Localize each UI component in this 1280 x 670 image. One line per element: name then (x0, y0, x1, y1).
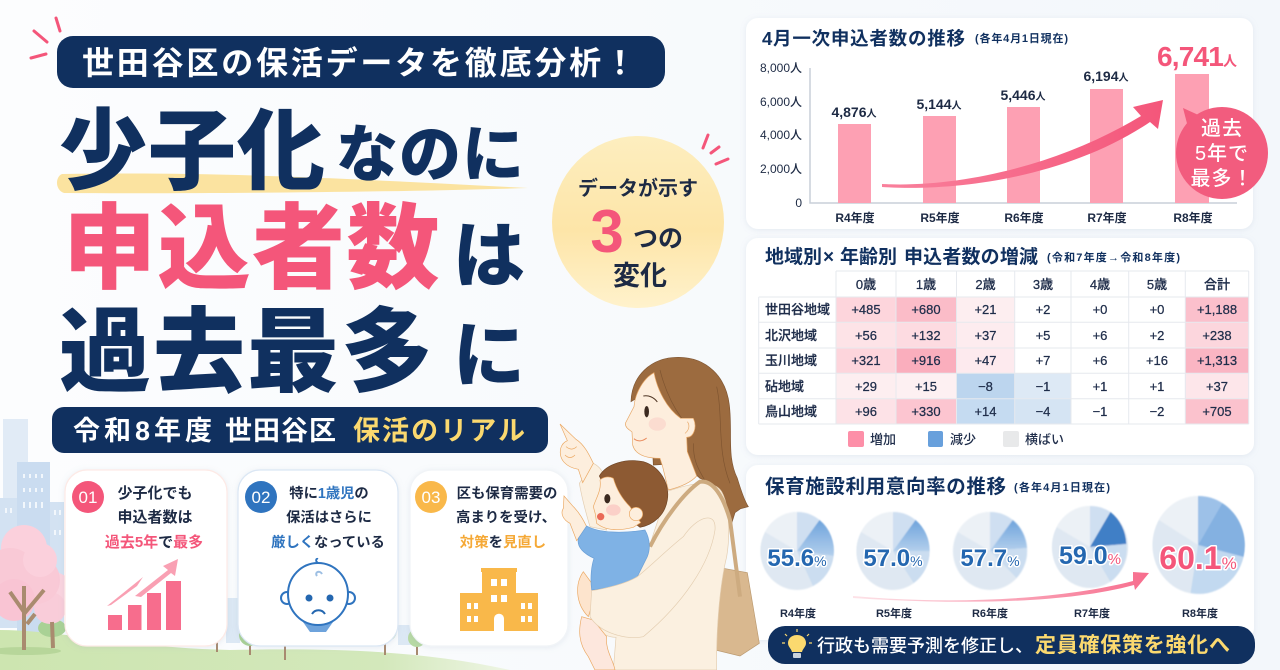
headline pill: 世田谷区の保活データを徹底分析！ (82, 45, 636, 81)
row: 鳥山地域: −4 (1036, 404, 1050, 419)
icon: worried baby (281, 559, 355, 632)
chart heading: (各年4月1日現在) (975, 31, 1068, 45)
pie values: 57.0% (863, 545, 923, 572)
subtitle pill: 令和8年度 (73, 416, 212, 446)
legend: 増加 (870, 432, 896, 447)
mother sweater (589, 483, 729, 670)
row: 北沢地域: +132 (911, 328, 941, 343)
bubble: 過去 (1201, 117, 1243, 140)
chart heading (762, 28, 1068, 49)
baby arm (562, 496, 587, 541)
table header (856, 277, 1230, 292)
row: 世田谷地域: +1,188 (1197, 302, 1237, 317)
row: 世田谷地域: +0 (1150, 302, 1164, 317)
pie labels: R7年度 (1074, 606, 1110, 620)
mother raised arm (579, 463, 607, 530)
row: 鳥山地域: −2 (1150, 404, 1164, 419)
baby shirt (578, 526, 649, 590)
x labels: R6年度 (1004, 210, 1044, 225)
legend: 減少 (950, 432, 976, 447)
pie R5 (856, 512, 930, 590)
row: 鳥山地域: 鳥山地域 (765, 404, 817, 419)
pie arrow (853, 572, 1149, 602)
row: 鳥山地域: +705 (1202, 404, 1232, 419)
conclusion pill: 定員確保策を強化へ (1035, 634, 1230, 657)
accent strokes: circle (703, 135, 728, 164)
legend: 横ばい (1025, 432, 1064, 447)
bubble: 5年で (1195, 142, 1249, 165)
row: 鳥山地域: +330 (911, 404, 941, 419)
row: 鳥山地域: −1 (1093, 404, 1107, 419)
row: 砧地域: +1 (1150, 379, 1164, 394)
mother hand (560, 424, 593, 483)
card 01 (65, 470, 227, 646)
card 02 text: 保活はさらに (286, 509, 372, 526)
row: 玉川地域: +6 (1093, 353, 1107, 368)
bar values: 5,144人 (916, 96, 962, 112)
row: 鳥山地域: +14 (974, 404, 997, 419)
card 03 text (456, 485, 557, 551)
callout: three changes: つの (633, 225, 683, 253)
callout: three changes: 3 (590, 198, 624, 265)
table heading (765, 245, 1180, 268)
x labels: R4年度 (835, 210, 875, 225)
row: 世田谷地域: +485 (851, 302, 881, 317)
chart heading: 4月一次申込者数の推移 (762, 28, 965, 49)
icon: rising bars (107, 559, 181, 630)
x labels: R7年度 (1087, 210, 1127, 225)
callout: three changes (552, 136, 724, 308)
row: 砧地域: 砧地域 (765, 379, 804, 394)
panel heading: 保育施設利用意向率の推移 (765, 476, 1006, 498)
row: 世田谷地域: +21 (974, 302, 997, 317)
card 02 text: 厳しくなっている (271, 533, 385, 551)
table heading: 年齢別 (840, 245, 897, 268)
row: 世田谷地域: +680 (911, 302, 941, 317)
table header: 2歳 (975, 277, 996, 292)
y axis (760, 61, 1237, 210)
bar values: 5,446人 (1000, 87, 1046, 103)
hair back (631, 357, 748, 523)
pie labels: R4年度 (780, 606, 816, 620)
card 01 text: 申込者数は (117, 508, 193, 526)
row: 玉川地域: +16 (1146, 353, 1168, 368)
row: 北沢地域: 北沢地域 (765, 328, 817, 343)
mother eye and mouth (634, 396, 689, 441)
table header: 5歳 (1147, 277, 1167, 292)
table heading: (令和7年度→令和8年度) (1047, 250, 1180, 264)
card 02 text: 特に1歳児の (289, 485, 369, 502)
row: 北沢地域: +2 (1150, 328, 1164, 343)
cherry tree (0, 525, 73, 655)
row: 北沢地域 (765, 328, 1232, 343)
y axis: 0 (795, 196, 802, 210)
subtitle pill: 保活のリアル (353, 416, 525, 446)
baby features (597, 494, 643, 521)
callout: three changes: 変化 (613, 261, 667, 291)
row: 玉川地域: +916 (911, 353, 941, 368)
pie labels: R5年度 (876, 606, 912, 620)
pie values: 60.1% (1159, 540, 1237, 576)
row: 玉川地域 (765, 353, 1237, 368)
table header: 0歳 (856, 277, 876, 292)
row: 北沢地域: +56 (855, 328, 877, 343)
table header: 3歳 (1033, 277, 1053, 292)
row: 砧地域: +15 (915, 379, 937, 394)
conclusion pill (768, 626, 1255, 664)
baby head (599, 461, 668, 527)
ground (0, 630, 510, 670)
row: 世田谷地域: +0 (1093, 302, 1107, 317)
callout: three changes: データが示す (578, 176, 698, 200)
card 01 text (105, 485, 203, 551)
icon: building (460, 568, 538, 631)
title: 過去最多 (59, 302, 435, 404)
x labels (835, 210, 1213, 225)
row: 砧地域: +29 (855, 379, 877, 394)
row: 世田谷地域: +2 (1036, 302, 1050, 317)
bars (838, 74, 1209, 203)
row: 玉川地域: +47 (974, 353, 997, 368)
bag (713, 568, 759, 656)
panel: intention rate (746, 465, 1254, 640)
row: 北沢地域: +6 (1093, 328, 1107, 343)
bar values: 6,194人 (1083, 68, 1129, 84)
card 01 text: 少子化でも (117, 485, 193, 502)
conclusion pill: 行政も需要予測を修正し、 (817, 636, 1033, 656)
row: 玉川地域: 玉川地域 (765, 353, 817, 368)
pie labels (780, 606, 1218, 620)
baby legs (580, 617, 615, 670)
row: 鳥山地域 (765, 404, 1232, 419)
pie R6 (953, 512, 1027, 590)
row: 玉川地域: +7 (1036, 353, 1050, 368)
subtitle pill: 世田谷区 (225, 416, 336, 446)
card 03 text: 対策を見直し (460, 533, 546, 551)
icon: light bulb (782, 629, 812, 658)
bar values: 4,876人 (831, 104, 877, 120)
mother forearm (590, 518, 715, 637)
strap (650, 482, 740, 597)
card 02 (238, 470, 398, 646)
card 02 text (271, 485, 385, 551)
card 03 text: 区も保育需要の (457, 485, 557, 502)
row: 北沢地域: +37 (974, 328, 997, 343)
pie values: 55.6% (767, 545, 827, 572)
pie R8 (1152, 496, 1245, 594)
title: は (453, 217, 525, 297)
y axis: 8,000人 (760, 61, 802, 75)
badge 02: 02 (252, 488, 270, 507)
row: 砧地域: +37 (1206, 379, 1228, 394)
card 03 (410, 470, 568, 646)
table header: 合計 (1204, 277, 1230, 292)
row: 北沢地域: +238 (1202, 328, 1232, 343)
bar values (831, 68, 1129, 120)
illustration: mother and baby (560, 357, 759, 670)
cell tints (836, 297, 1249, 424)
y axis: 4,000人 (760, 128, 802, 142)
table heading: 申込者数の増減 (904, 245, 1038, 268)
title (59, 102, 525, 404)
badge 03: 03 (422, 488, 440, 507)
row: 砧地域: −1 (1036, 379, 1050, 394)
table heading: × (823, 247, 834, 268)
panel heading (765, 476, 1110, 498)
accent strokes: top left (31, 18, 60, 58)
row: 世田谷地域 (765, 302, 1237, 317)
card 01 text: 過去5年で最多 (105, 533, 203, 551)
panel: application chart (746, 18, 1268, 229)
row: 世田谷地域: 世田谷地域 (765, 302, 830, 317)
badge 01: 01 (79, 488, 97, 507)
row: 玉川地域: +321 (851, 353, 881, 368)
panel: region table (746, 238, 1254, 455)
x labels: R8年度 (1173, 210, 1213, 225)
row: 砧地域: −8 (978, 379, 993, 394)
y axis: 6,000人 (760, 95, 802, 109)
row: 鳥山地域: +96 (855, 404, 877, 419)
pie labels: R8年度 (1182, 606, 1218, 620)
pie values (767, 540, 1237, 576)
small trees (217, 618, 426, 660)
bubble (1176, 107, 1268, 199)
bubble: 最多！ (1190, 167, 1254, 190)
city buildings (0, 419, 412, 645)
title: なのに (336, 121, 525, 190)
panel heading: (各年4月1日現在) (1014, 480, 1110, 494)
badge 02 (245, 481, 277, 513)
card 03 text: 高まりを受け、 (456, 508, 556, 526)
y axis: 2,000人 (760, 162, 802, 176)
row: 北沢地域: +5 (1036, 328, 1050, 343)
legend (848, 431, 1064, 447)
row: 砧地域 (765, 379, 1228, 394)
title: に (453, 317, 525, 397)
row: 玉川地域: +1,313 (1197, 353, 1237, 368)
table header: 4歳 (1090, 277, 1110, 292)
title: 申込者数 (63, 197, 441, 301)
peak value: 6,741人 (1157, 41, 1237, 72)
pie values: 57.7% (960, 545, 1020, 572)
mother face (625, 373, 697, 490)
headline pill (57, 36, 665, 88)
row: 砧地域: +1 (1093, 379, 1107, 394)
title highlight (57, 174, 528, 193)
badge 03 (415, 481, 447, 513)
baby face (593, 477, 641, 530)
badge 01 (72, 481, 104, 513)
pie labels: R6年度 (972, 606, 1008, 620)
pie R7 (1052, 506, 1128, 588)
table header: 1歳 (916, 277, 936, 292)
title: 少子化 (59, 102, 326, 201)
pie R4 (760, 512, 834, 590)
arrow (882, 100, 1163, 188)
subtitle pill (52, 407, 548, 453)
pie values: 59.0% (1059, 542, 1121, 570)
table heading: 地域別 (765, 246, 822, 268)
x labels: R5年度 (920, 210, 960, 225)
